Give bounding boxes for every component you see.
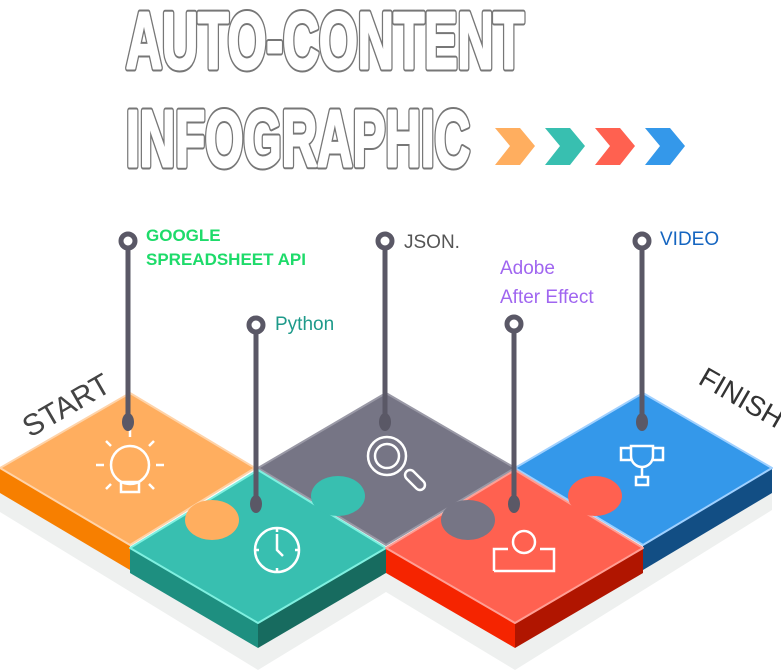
pins bbox=[121, 234, 649, 513]
knob gray bbox=[441, 500, 495, 540]
red sides bbox=[386, 548, 515, 648]
piece: orange bbox=[0, 393, 255, 545]
puzzle board bbox=[0, 393, 772, 648]
label: google: SPREADSHEET API bbox=[146, 250, 306, 269]
piece: blue bbox=[515, 393, 772, 545]
labels bbox=[146, 226, 719, 335]
label: video: VIDEO bbox=[660, 229, 719, 250]
label: python: Python bbox=[275, 314, 334, 335]
piece: gray bbox=[258, 393, 515, 545]
pin 1 bbox=[121, 234, 135, 431]
label: google: GOOGLE bbox=[146, 226, 221, 245]
icon: magnifier bbox=[368, 437, 427, 492]
label: adobe: After Effect bbox=[500, 287, 594, 308]
pin 5 bbox=[635, 234, 649, 431]
piece: red bbox=[386, 470, 643, 623]
chevron arrows bbox=[495, 128, 685, 165]
label: json: JSON. bbox=[404, 232, 460, 253]
START text: START bbox=[17, 368, 116, 444]
title bbox=[126, 0, 524, 183]
piece: teal bbox=[130, 470, 386, 623]
title: INFOGRAPHIC bbox=[126, 94, 470, 183]
orange side bbox=[0, 468, 130, 570]
icon: trophy bbox=[621, 446, 663, 485]
shadow bbox=[0, 490, 772, 670]
pin 2 bbox=[249, 318, 263, 513]
icon: clock bbox=[255, 528, 299, 572]
blue side bbox=[643, 468, 772, 570]
knob orange bbox=[185, 500, 239, 540]
icon: light bulb bbox=[96, 430, 164, 492]
pin 3 bbox=[378, 234, 392, 431]
title: INFOGRAPHIC bbox=[126, 94, 470, 183]
label: adobe: Adobe bbox=[500, 258, 555, 279]
icon: person bbox=[494, 531, 554, 571]
teal sides bbox=[130, 548, 258, 648]
pin 4 bbox=[507, 317, 521, 513]
